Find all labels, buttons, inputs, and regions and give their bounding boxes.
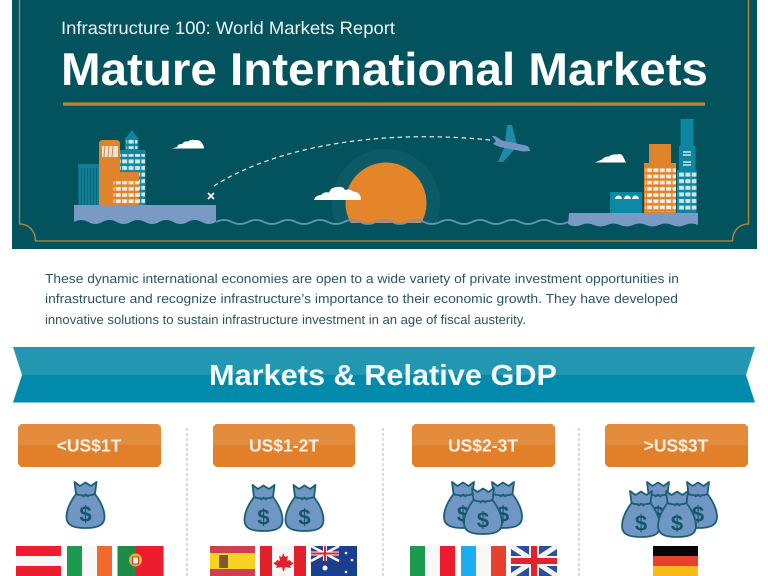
flag: United Kingdom — [511, 546, 557, 576]
illustration: airplane — [492, 125, 530, 162]
flag: Austria — [16, 546, 61, 576]
column: US$1-2T — [210, 424, 357, 576]
title rule — [63, 102, 705, 106]
illustration: flight path — [214, 137, 490, 186]
illustration: departure mark — [208, 193, 214, 199]
money bag — [66, 482, 104, 528]
illustration: cloud left — [172, 140, 204, 148]
column: under US$1T — [16, 424, 164, 576]
flag: Canada — [260, 546, 306, 576]
illustration: cloud right — [595, 154, 626, 162]
report subtitle: Infrastructure 100: World Markets Report — [61, 18, 395, 38]
gold border frame — [20, 0, 748, 241]
intro text block: These dynamic international economies are open to a wide variety of private investment opportunities in — [45, 271, 679, 286]
money bags: $ — [692, 502, 704, 526]
money bags: $ — [257, 504, 270, 530]
flag: Germany — [653, 546, 698, 576]
flag: Italy — [410, 546, 455, 576]
tab: US$2-3T: US$2-3T — [448, 436, 518, 456]
money bags — [244, 485, 324, 531]
main title: Mature International Markets — [61, 43, 708, 95]
tab: under US$1T: <US$1T — [57, 436, 122, 456]
column dividers — [187, 428, 579, 576]
tab: US$2-3T — [412, 424, 555, 467]
intro text block — [45, 271, 679, 327]
money bags — [622, 482, 717, 537]
illustration: right island city — [568, 119, 698, 226]
tab: US$1-2T — [213, 424, 355, 467]
flag: Portugal — [118, 546, 164, 576]
money bags: $ — [635, 510, 647, 536]
tab: under US$1T — [18, 424, 161, 467]
money bag: $ — [79, 502, 92, 526]
money bags: $ — [671, 510, 683, 536]
tab: US$1-2T: US$1-2T — [249, 436, 319, 456]
money bags: $ — [477, 508, 489, 532]
column: US$2-3T — [410, 424, 557, 576]
money bags: $ — [457, 502, 469, 526]
intro text block: infrastructure and recognize infrastructure’s importance to their economic growth. They have developed — [45, 291, 678, 306]
money bags: $ — [652, 502, 664, 526]
flag: Australia — [311, 546, 357, 576]
tab: over US$3T: >US$3T — [644, 436, 709, 456]
column: over US$3T — [605, 424, 748, 576]
flag: France — [461, 546, 506, 576]
illustration: cloud centre — [314, 187, 361, 200]
header panel — [12, 0, 757, 257]
illustration: sun — [332, 149, 440, 223]
money bags — [444, 482, 522, 534]
tab: over US$3T — [605, 424, 748, 467]
money bags: $ — [298, 504, 311, 530]
intro text block: innovative solutions to sustain infrastructure investment in an age of fiscal austerity. — [45, 312, 526, 327]
flag: Spain — [210, 546, 255, 576]
flag: Ireland — [67, 546, 112, 576]
illustration: waves — [216, 219, 581, 224]
banner heading: Markets & Relative GDP — [209, 360, 557, 392]
illustration: left island city — [74, 130, 216, 224]
banner: markets and relative GDP — [13, 347, 755, 402]
money bags: $ — [497, 502, 509, 526]
